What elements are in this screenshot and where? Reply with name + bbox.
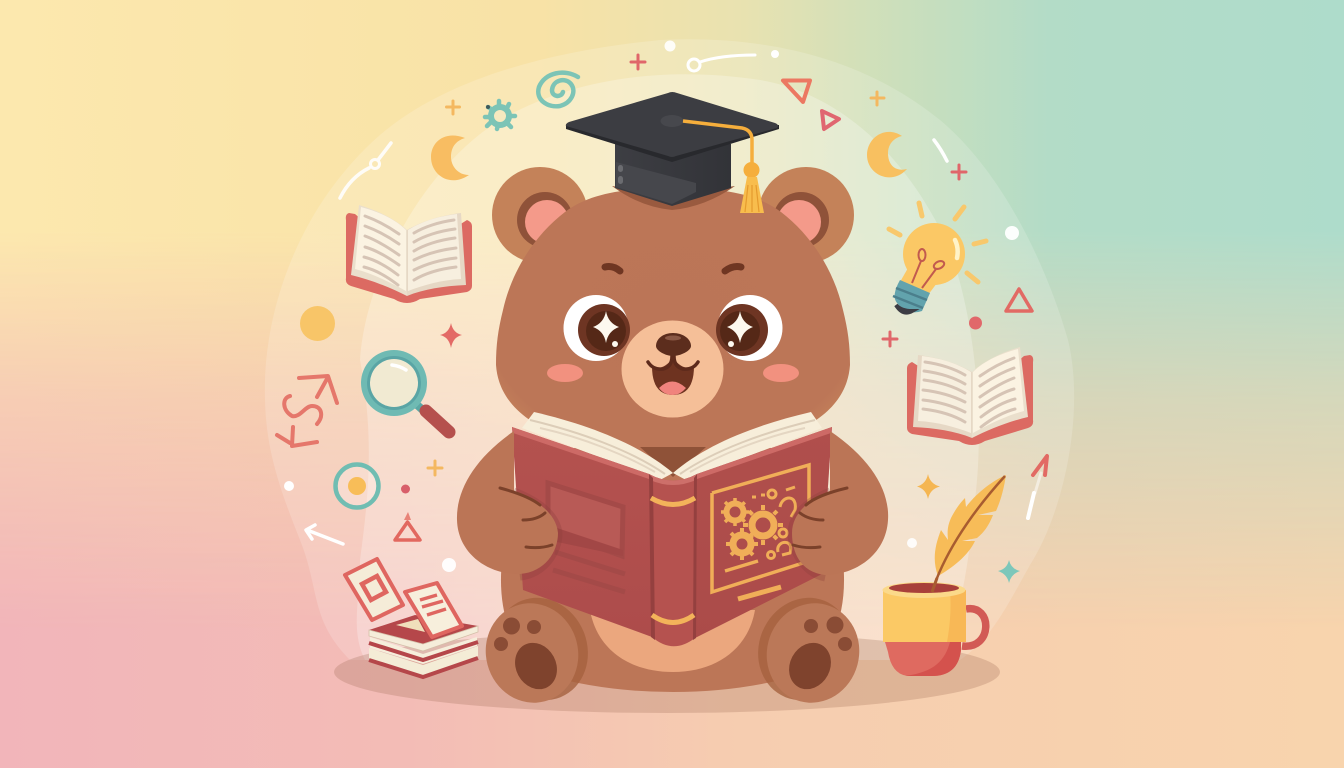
icon: gold orb	[300, 306, 335, 341]
icon: plus red right	[883, 332, 897, 346]
icon: red arrows symbols	[277, 376, 337, 446]
icon: red dot right	[969, 316, 982, 330]
icon: light bulb	[889, 203, 986, 313]
cup rim	[882, 582, 966, 598]
icon: cup	[882, 582, 986, 676]
cap board	[566, 92, 779, 162]
body	[501, 420, 844, 692]
tassel	[740, 162, 764, 213]
cap base	[615, 144, 731, 206]
left cover	[512, 427, 652, 637]
icon: white dot cup	[907, 538, 917, 548]
cup body	[883, 590, 966, 642]
soft outer halo	[265, 39, 1074, 660]
book pages	[522, 412, 822, 480]
icon: spiral	[538, 73, 578, 106]
icon: triangle right	[1006, 289, 1032, 311]
cap button	[660, 115, 684, 127]
spine	[649, 474, 697, 646]
arm right	[792, 431, 888, 575]
icon: open book left	[346, 205, 472, 303]
icon: triangle left	[395, 512, 420, 540]
eye left	[564, 295, 630, 361]
foot left	[475, 584, 603, 714]
ear left	[492, 167, 588, 263]
card right	[405, 583, 462, 637]
icon: feather	[932, 475, 1006, 592]
tassel cord	[683, 121, 752, 165]
icon: target ring	[336, 464, 378, 508]
gear 2	[743, 505, 783, 545]
belly	[590, 610, 755, 672]
icon: moon left	[431, 135, 469, 180]
nose	[656, 333, 691, 356]
muzzle	[622, 320, 724, 418]
graduation cap	[566, 92, 779, 213]
gold frame and gears	[712, 465, 809, 599]
feather quill in cup	[932, 578, 937, 592]
mouth	[648, 356, 698, 395]
icon: plus red top	[631, 55, 645, 69]
right cover	[695, 427, 832, 638]
head	[496, 188, 850, 452]
small gears and arcs	[752, 487, 795, 558]
icon: dots and plus left	[284, 461, 456, 572]
cover edge highlight	[512, 427, 832, 479]
icon: plus gold left	[446, 101, 460, 114]
icon: gear teal	[485, 101, 515, 129]
card left	[345, 559, 403, 620]
soft inner halo	[357, 74, 979, 660]
eye right	[716, 295, 782, 361]
hand shadows on book	[514, 491, 830, 578]
ear right	[758, 167, 854, 263]
ground shadow	[334, 631, 1000, 713]
cup handle	[962, 609, 986, 646]
icon: white arrow	[306, 525, 343, 544]
hat shadow	[612, 186, 735, 210]
icon: sparkle gold	[917, 474, 940, 499]
icon: stack of books with cards	[345, 559, 478, 677]
arm left	[457, 431, 558, 574]
eyebrows	[605, 266, 741, 271]
icon: triangles top right	[783, 80, 839, 129]
icon: white dot right	[1005, 226, 1019, 240]
gear 3	[726, 528, 758, 560]
icon: white squiggle	[340, 143, 391, 198]
bear	[475, 167, 870, 714]
red book	[512, 412, 832, 646]
icon: sparkle teal	[998, 560, 1020, 583]
icon: arrow and dashes right	[1028, 456, 1047, 518]
icon: sparkle red	[440, 323, 462, 348]
gear 1	[721, 498, 749, 526]
icon: white dash and plus right	[934, 140, 966, 179]
cheeks	[547, 364, 799, 382]
middle book	[370, 637, 477, 664]
icon: plus gold top right	[871, 92, 884, 105]
left cover embossing	[548, 483, 625, 592]
icon: moon right	[867, 132, 907, 177]
foot right	[743, 584, 870, 714]
icon: open book right	[907, 347, 1033, 445]
top book	[369, 615, 478, 644]
icon: white dots and arc	[664, 40, 779, 71]
neck shadow	[640, 447, 706, 477]
bottom book	[369, 646, 478, 677]
icon: magnifying glass	[361, 350, 449, 432]
